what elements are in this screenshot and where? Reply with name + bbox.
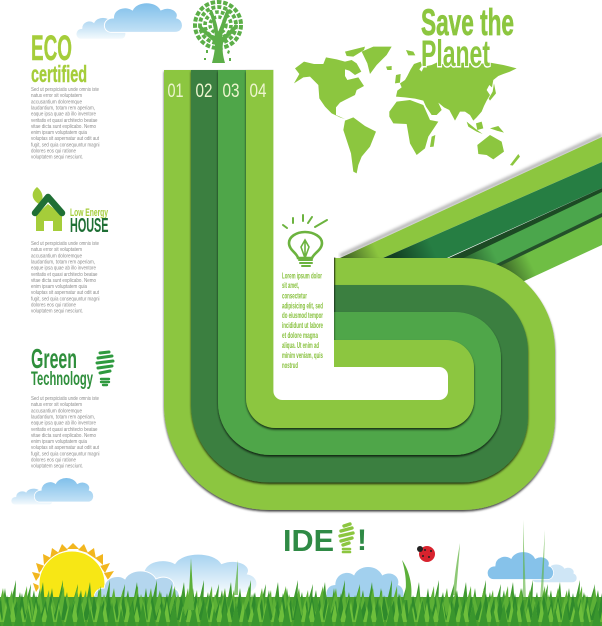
column numbers: 04 (250, 81, 267, 102)
text block: eco certified: eaque ipsa quae ab illo inventore (31, 112, 96, 118)
text block: low energy house: enim ipsam voluptatem quia (31, 284, 87, 290)
heading: Low Energy House: Low Energy (70, 207, 109, 219)
text block: green technology: enim ipsam voluptatem quia (31, 439, 87, 445)
text block: low energy house: eaque ipsa quae ab illo inventore (31, 266, 96, 272)
cloud: right (487, 552, 577, 582)
heading: Green Technology: Green (31, 343, 77, 374)
icon: tree (195, 2, 241, 63)
heading: Save the Planet: Save the (421, 2, 514, 43)
heading: Low Energy House: HOUSE (70, 215, 108, 237)
text block: green technology: veritatis et quasi architecto beatae (31, 427, 98, 433)
text block: low energy house: Sed ut perspiciatis unde omnis iste (31, 241, 99, 247)
text block: low energy house: fugit, sed quia consequuntur magni (31, 296, 100, 302)
text block: eco certified (31, 87, 100, 161)
cloud: ground clouds left (94, 554, 257, 604)
text block: low energy house: voluptas sit aspernatur aut odit aut (31, 290, 100, 296)
heading: Low Energy House (70, 207, 109, 237)
text block: lorem ipsum: minim veniam, quis (282, 350, 323, 360)
text block: low energy house: veritatis et quasi architecto beatae (31, 272, 98, 278)
text block: lorem ipsum: incididunt ut labore (282, 320, 323, 330)
text block: lorem ipsum: et dolore magna (282, 330, 318, 340)
text block: lorem ipsum: sit amet, (282, 280, 299, 290)
icon: ladybug (417, 546, 435, 562)
text block: green technology: accusantium doloremque (31, 408, 82, 414)
cloud: ground cloud centre (326, 567, 403, 602)
text block: green technology: dolores eos qui ratione (31, 458, 76, 464)
text block: lorem ipsum (282, 270, 323, 370)
panel: band 2 dark green (191, 70, 528, 482)
text block: eco certified: accusantium doloremque (31, 99, 82, 105)
text block: low energy house: natus error sit voluptatem (31, 247, 82, 253)
icon: house with leaf (33, 187, 62, 231)
text block: low energy house: laudantium, totam rem aperiam, (31, 260, 95, 266)
text block: eco certified: Sed ut perspiciatis unde omnis iste (31, 87, 99, 93)
text block: eco certified: dolores eos qui ratione (31, 148, 76, 154)
icon: save the planet world map (294, 47, 520, 173)
column numbers (168, 81, 267, 102)
heading: Green Technology (31, 343, 93, 390)
text block: eco certified: natus error sit voluptatem (31, 93, 82, 99)
diagonal stripes (340, 135, 602, 285)
text block: lorem ipsum: Lorem ipsum dolor (282, 270, 322, 280)
text block: green technology: Sed ut perspiciatis unde omnis iste (31, 396, 99, 402)
heading: IDEA with bulb: ! (357, 524, 367, 557)
panel: band 3 medium green (218, 70, 501, 455)
text block: eco certified: laudantium, totam rem aperiam, (31, 106, 95, 112)
heading: IDEA with bulb: IDE (283, 523, 334, 558)
text block: green technology (31, 396, 100, 470)
text block: lorem ipsum: adipisicing elit, sed (282, 300, 323, 310)
heading: ECO certified: ECO (31, 29, 72, 68)
icon: sun (32, 543, 114, 617)
heading: Save the Planet: Planet (421, 33, 490, 74)
heading: Green Technology: Technology (31, 369, 93, 390)
heading: ECO certified: certified (31, 61, 87, 87)
cloud: top (76, 3, 182, 39)
text block: lorem ipsum: aliqua. Ut enim ad (282, 340, 319, 350)
grass (0, 520, 602, 626)
panel: band 1 light green (164, 70, 555, 510)
text block: eco certified: enim ipsam voluptatem quia (31, 130, 87, 136)
text block: low energy house: vitae dicta sunt explicabo. Nemo (31, 278, 96, 284)
icon: striped eco bulb (97, 352, 113, 385)
text block: eco certified: fugit, sed quia consequuntur magni (31, 142, 100, 148)
text block: eco certified: voluptatem sequi nesciunt. (31, 155, 83, 161)
column numbers: 02 (196, 81, 212, 102)
text block: lorem ipsum: do eiusmod tempor (282, 310, 323, 320)
heading: ECO certified (31, 29, 87, 87)
text block: green technology: eaque ipsa quae ab illo inventore (31, 421, 96, 427)
text block: lorem ipsum: consectetur (282, 290, 307, 300)
text block: eco certified: veritatis et quasi architecto beatae (31, 118, 98, 124)
text block: green technology: voluptas sit aspernatur aut odit aut (31, 445, 100, 451)
text block: low energy house (31, 241, 100, 315)
inner white area (273, 60, 448, 400)
panel: band 4 light green (246, 70, 474, 428)
text block: green technology: voluptatem sequi nesciunt. (31, 464, 83, 470)
text block: eco certified: vitae dicta sunt explicabo. Nemo (31, 124, 96, 130)
heading: Save the Planet (421, 2, 514, 74)
text block: green technology: laudantium, totam rem aperiam, (31, 414, 95, 420)
text block: green technology: natus error sit voluptatem (31, 402, 82, 408)
text block: low energy house: accusantium doloremque (31, 253, 82, 259)
column numbers: 03 (222, 81, 240, 102)
icon: light bulb with rays (283, 215, 327, 266)
column numbers: 01 (168, 81, 184, 102)
heading: IDEA with bulb (283, 523, 367, 558)
text block: green technology: vitae dicta sunt explicabo. Nemo (31, 433, 96, 439)
text block: lorem ipsum: nostrud (282, 360, 298, 370)
text block: low energy house: dolores eos qui ratione (31, 302, 76, 308)
text block: green technology: fugit, sed quia consequuntur magni (31, 451, 100, 457)
text block: low energy house: voluptatem sequi nesciunt. (31, 309, 83, 315)
cloud: lower left (11, 478, 94, 505)
text block: eco certified: voluptas sit aspernatur aut odit aut (31, 136, 100, 142)
